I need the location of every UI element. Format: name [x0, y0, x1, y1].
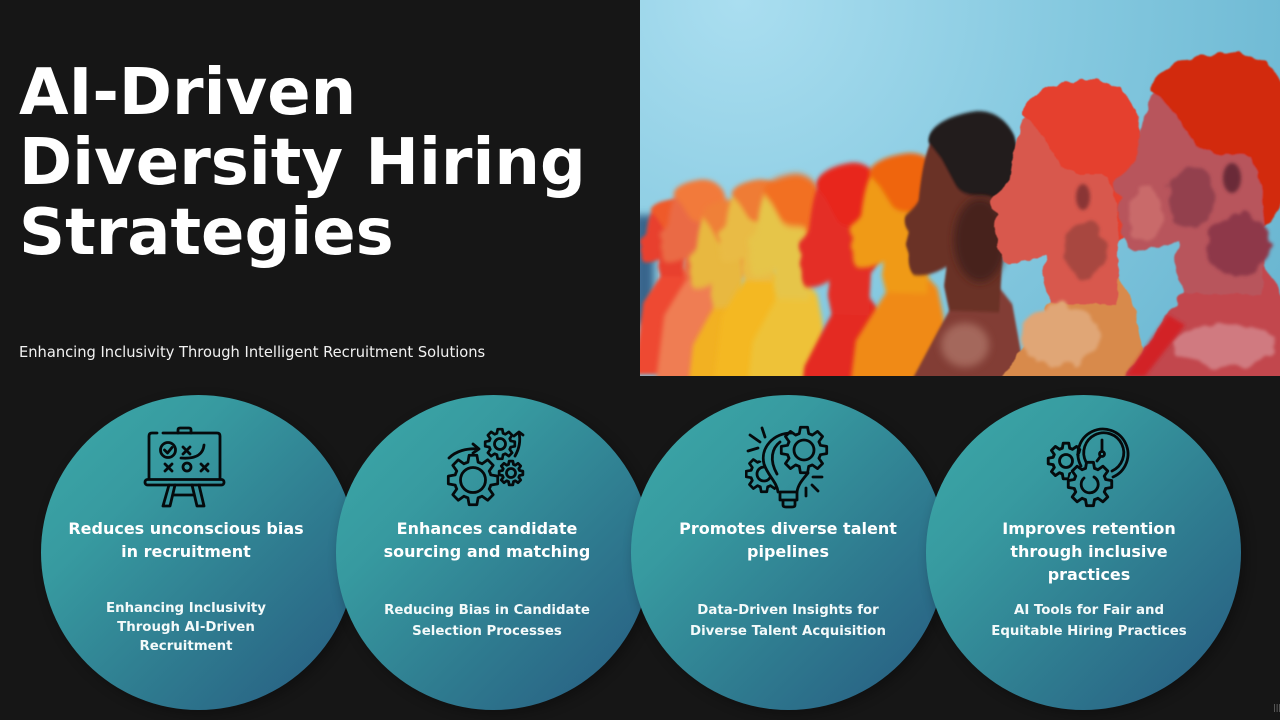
heading: Promotes diverse talent: [679, 519, 897, 538]
heading: Reduces unconscious bias: [68, 519, 304, 538]
icon: strategy board: [144, 426, 226, 508]
figure 2: [975, 79, 1149, 589]
figure 1 ear: [1223, 163, 1241, 193]
figure 4: [839, 153, 948, 471]
body text: Data-Driven Insights for: [697, 603, 879, 618]
heading: through inclusive: [1010, 542, 1168, 561]
figure 8: [652, 179, 730, 409]
figure 2 chest highlight: [1022, 303, 1098, 367]
subtitle: Enhancing Inclusivity Through Intelligent Recruitment Solutions: [19, 344, 485, 361]
figure 1 red collar: [1126, 315, 1185, 376]
body text: Equitable Hiring Practices: [991, 624, 1187, 639]
figure 7: [682, 200, 756, 446]
figure 6: [740, 174, 826, 458]
figure 6b: [710, 179, 788, 409]
body text: Diverse Talent Acquisition: [690, 624, 886, 639]
heading: [68, 519, 304, 561]
body text: AI Tools for Fair and: [1014, 603, 1164, 618]
figure 5: [789, 163, 888, 508]
heading: [384, 519, 590, 561]
body text: Recruitment: [140, 638, 232, 654]
heading: Improves retention: [1002, 519, 1176, 538]
heading: pipelines: [747, 542, 829, 561]
body text: [991, 603, 1187, 639]
heading: [679, 519, 897, 561]
figure 1 face shade: [1168, 167, 1216, 227]
panel: circle 3: [631, 395, 946, 710]
heading: Enhances candidate: [397, 519, 577, 538]
title: [19, 56, 586, 270]
figure 2 neck shade: [1063, 222, 1107, 278]
body text: [690, 603, 886, 639]
icon: gears with arrows: [446, 428, 524, 506]
heading: sourcing and matching: [384, 542, 590, 561]
heading: practices: [1048, 565, 1130, 584]
body text: [384, 603, 590, 639]
panel: circle 2: [336, 395, 651, 710]
figure 3 neck shade: [954, 198, 1006, 282]
heading: in recruitment: [121, 542, 251, 561]
body text: Through AI-Driven: [117, 620, 255, 634]
body text: Selection Processes: [412, 624, 562, 639]
figure 3 shoulder highlight: [941, 323, 989, 367]
distant dark patch: [634, 215, 654, 325]
image: row of colourful sculpted profiles: [640, 0, 1280, 376]
body text: Enhancing Inclusivity: [106, 600, 266, 616]
title: AI-Driven: [19, 56, 356, 130]
figure 1 cheek highlight: [1128, 187, 1162, 243]
heading: [1002, 519, 1176, 584]
sky background: [640, 0, 1280, 376]
panel: circle 4: [926, 395, 1241, 710]
icon: light bulb with gears: [745, 426, 828, 508]
icon: clock with gears: [1046, 428, 1130, 508]
title: Diversity Hiring: [19, 126, 586, 200]
figure 3: [892, 111, 1025, 566]
figure 1 neck shade: [1206, 215, 1270, 275]
figure 1 chest highlight: [1175, 323, 1275, 367]
body text: Reducing Bias in Candidate: [384, 603, 590, 618]
body text: [106, 600, 266, 654]
figure 9: [634, 199, 696, 374]
title: Strategies: [19, 196, 394, 270]
figure 1: [1095, 52, 1280, 600]
figure 2 ear: [1076, 184, 1090, 210]
panel: circle 1: [41, 395, 356, 710]
